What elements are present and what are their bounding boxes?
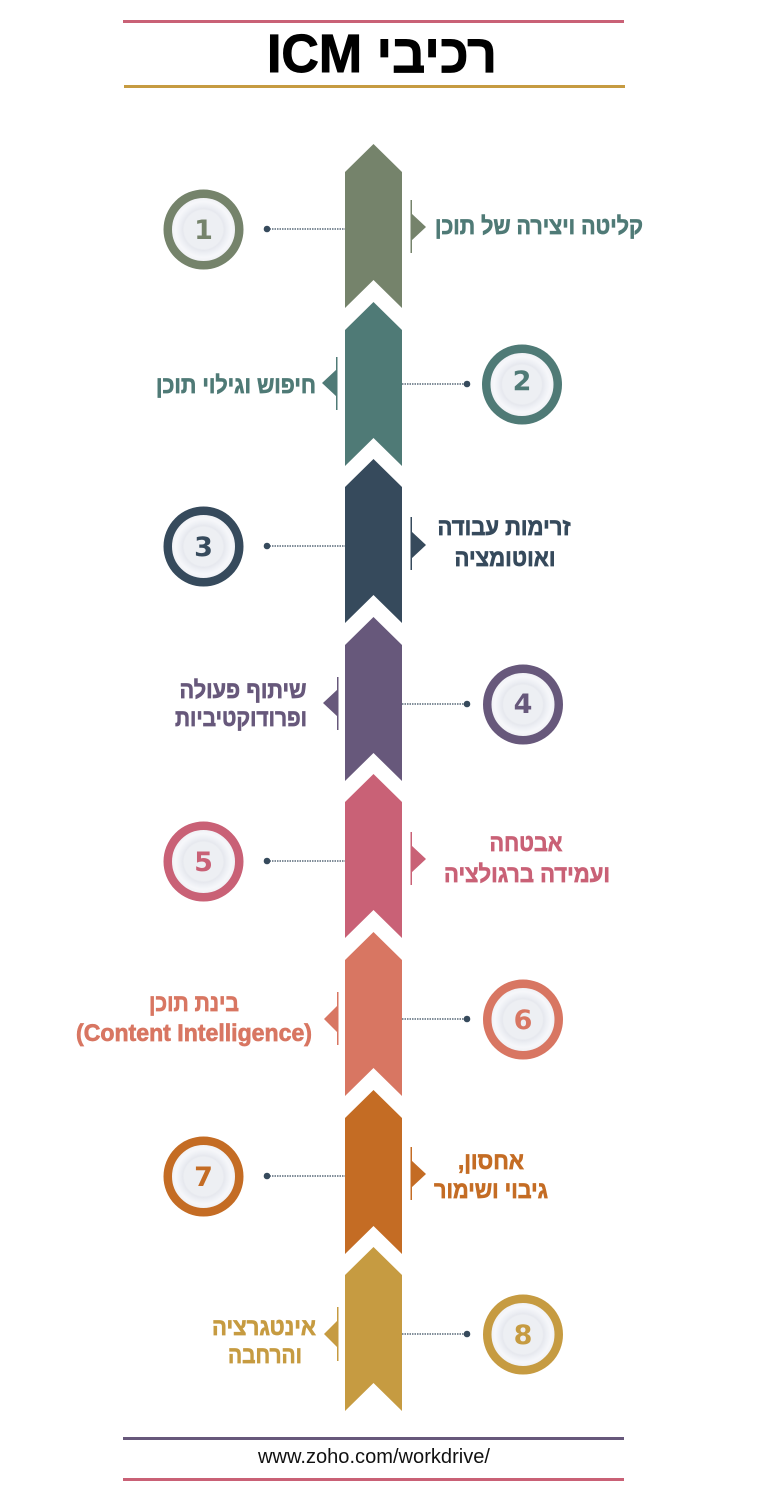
ribbon segment 4 [345, 617, 402, 781]
label 7: אחסון, [458, 1148, 524, 1175]
number badge 1 [168, 194, 239, 265]
label 8: אינטגרציה [212, 1314, 316, 1341]
label 5: ועמידה ברגולציה [444, 861, 610, 888]
label 1: קליטה ויצירה של תוכן [435, 213, 643, 240]
title: רכיבי ICM [267, 24, 497, 84]
header rule top [123, 20, 624, 23]
connector 1 [264, 226, 345, 232]
label 3: ואוטומציה [454, 545, 556, 572]
label 6: בינת תוכן [149, 990, 239, 1017]
label 3 [438, 514, 571, 572]
label 4 [175, 677, 307, 732]
footer rule top [123, 1437, 624, 1440]
number badge 7 [168, 1141, 239, 1212]
connector 8 [402, 1331, 470, 1337]
label 5 [444, 830, 610, 888]
label 6: (Content Intelligence) [76, 1020, 312, 1047]
connector 3 [264, 543, 345, 549]
number badge 4 [487, 669, 559, 740]
connector 2 [402, 381, 470, 387]
number badge 7: 7 [194, 1162, 213, 1193]
step 3 [168, 459, 571, 623]
ribbon segment 2 [345, 302, 402, 466]
number badge 1: 1 [194, 215, 213, 246]
ribbon segment 5 [345, 774, 402, 938]
label 2: חיפוש וגילוי תוכן [156, 372, 316, 399]
callout marker 4 [323, 677, 338, 730]
connector 6 [402, 1016, 470, 1022]
label 5: אבטחה [490, 830, 562, 857]
number badge 3: 3 [194, 532, 213, 563]
label 6 [76, 990, 312, 1047]
step 1 [168, 144, 643, 308]
step 2 [156, 302, 558, 466]
number badge 2 [486, 349, 558, 420]
callout marker 3 [410, 517, 426, 570]
callout marker 6 [324, 992, 338, 1045]
step 5 [168, 774, 610, 938]
label 8 [212, 1314, 316, 1369]
ribbon segment 3 [345, 459, 402, 623]
step 7 [168, 1090, 548, 1254]
callout marker 1 [410, 200, 426, 253]
label 8: והרחבה [228, 1342, 302, 1369]
label 3: זרימות עבודה [438, 514, 571, 541]
connector 5 [264, 858, 345, 864]
step 4 [175, 617, 559, 781]
step 8 [212, 1247, 559, 1411]
number badge 5 [168, 826, 239, 897]
ribbon segment 7 [345, 1090, 402, 1254]
number badge 6: 6 [514, 1005, 532, 1036]
number badge 4: 4 [514, 689, 532, 720]
callout marker 2 [322, 357, 338, 410]
number badge 8 [487, 1299, 559, 1370]
number badge 2: 2 [513, 366, 531, 397]
ribbon segment 6 [345, 932, 402, 1096]
number badge 3 [168, 511, 239, 582]
footer rule bottom [123, 1478, 624, 1481]
callout marker 5 [410, 832, 426, 885]
label 7: גיבוי ושימור [434, 1177, 548, 1204]
connector 4 [402, 701, 470, 707]
callout marker 7 [410, 1147, 426, 1200]
label 4: שיתוף פעולה [180, 677, 306, 704]
label 4: ופרודוקטיביות [175, 705, 307, 732]
connector 7 [264, 1173, 345, 1179]
header rule bottom [124, 85, 625, 88]
label 7 [434, 1148, 548, 1204]
footer url: www.zoho.com/workdrive/ [257, 1446, 490, 1468]
ribbon segment 1 [345, 144, 402, 308]
number badge 6 [487, 984, 559, 1055]
number badge 8: 8 [514, 1320, 532, 1351]
number badge 5: 5 [194, 847, 213, 878]
ribbon segment 8 [345, 1247, 402, 1411]
callout marker 8 [324, 1307, 338, 1361]
step 6 [76, 932, 559, 1096]
